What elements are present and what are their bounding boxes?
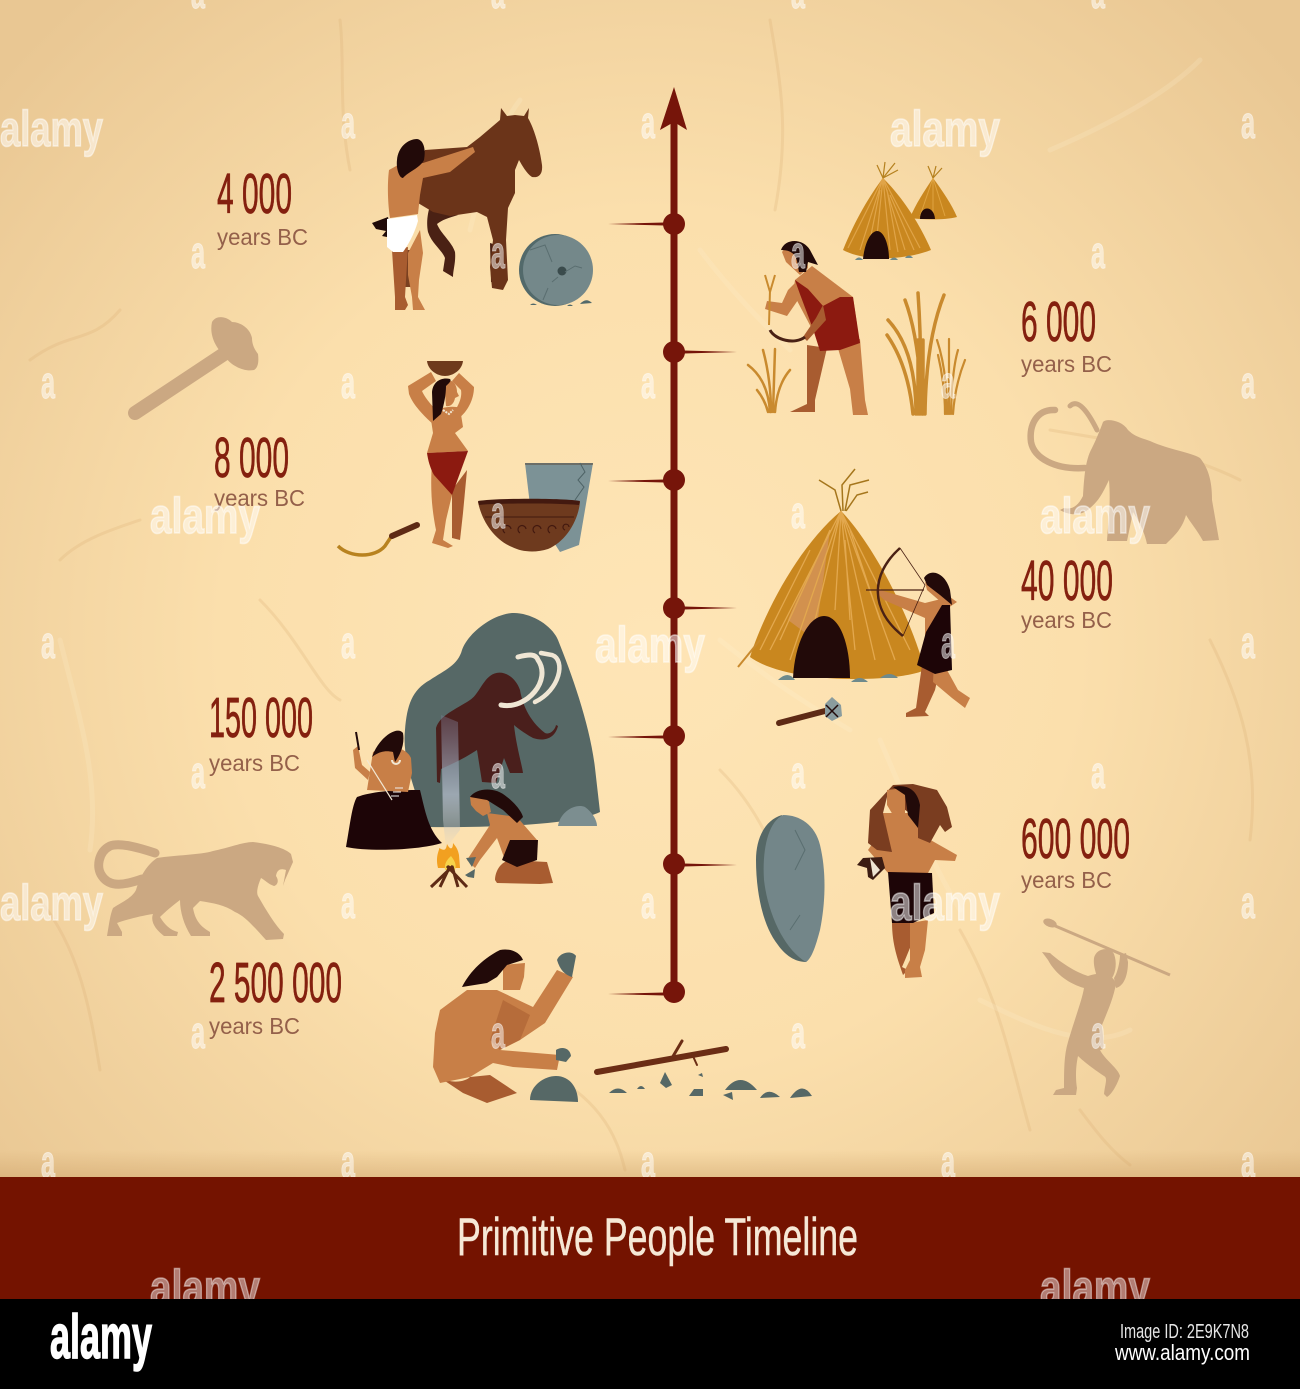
man from behind: [387, 139, 475, 310]
title band: alamy: [150, 1260, 260, 1316]
silhouette: spear thrower: [1042, 917, 1170, 1097]
gray pot: [525, 463, 593, 552]
stone wheel: [519, 234, 593, 306]
label: 40 000 years BC: 40 000: [1021, 549, 1113, 613]
hunter carrying prey: [857, 784, 957, 978]
campfire: [431, 843, 467, 887]
seated toolmaker: [433, 949, 576, 1103]
watermarks: a: [941, 617, 956, 668]
watermarks: a: [1241, 1136, 1256, 1187]
watermarks: a: [491, 747, 506, 798]
label: 6 000 years BC: years BC: [1021, 351, 1112, 377]
seated woman sewing: [346, 731, 442, 850]
watermarks: a: [191, 227, 206, 278]
label: 6 000 years BC: [1021, 290, 1112, 377]
woman: [408, 372, 474, 548]
near hut: [843, 162, 931, 260]
watermarks: alamy: [1040, 488, 1150, 544]
watermarks: alamy: [150, 488, 260, 544]
scene: hand axe and hunter: [756, 784, 957, 978]
image id: Image ID: 2E9K7N8: [1120, 1321, 1249, 1343]
scene: big hut and archer: [738, 469, 970, 723]
kneeling man: [465, 789, 553, 884]
timeline dots: [663, 213, 685, 1003]
label: 150 000 years BC: years BC: [209, 750, 300, 776]
watermarks: a: [791, 227, 806, 278]
label: 2 500 000 years BC: [209, 951, 342, 1039]
label: 8 000 years BC: years BC: [214, 485, 305, 511]
watermarks: a: [641, 877, 656, 928]
silhouette: mammoth: [1031, 404, 1219, 544]
label: 600 000 years BC: [1021, 807, 1130, 893]
watermarks: a: [41, 357, 56, 408]
branch: [597, 1041, 726, 1072]
sickle: [338, 525, 417, 555]
silhouette: sabre-tooth cat: [99, 842, 293, 940]
watermarks: alamy: [595, 617, 705, 673]
watermarks: a: [341, 357, 356, 408]
label: 600 000 years BC: 600 000: [1021, 807, 1130, 871]
painted mammoth: [436, 653, 559, 783]
label: 150 000 years BC: [209, 686, 313, 776]
grass tufts: [748, 293, 965, 414]
clay bowl on head: [427, 361, 463, 376]
label: 4 000 years BC: years BC: [217, 224, 308, 250]
watermarks: a: [791, 747, 806, 798]
footer bar: [0, 1299, 1300, 1389]
label: 2 500 000 years BC: years BC: [209, 1013, 300, 1039]
watermarks: a: [1241, 617, 1256, 668]
label: 600 000 years BC: years BC: [1021, 867, 1112, 893]
silhouette: stone hammer: [135, 317, 258, 413]
title band: [0, 1177, 1300, 1316]
watermarks: a: [491, 1007, 506, 1058]
watermarks: a: [1091, 1007, 1106, 1058]
timeline arrow: [608, 87, 737, 1003]
stone mound: [530, 1076, 578, 1102]
label: 4 000 years BC: 4 000: [217, 162, 292, 226]
timeline ticks: [608, 222, 737, 996]
title: Primitive People Timeline: [457, 1208, 858, 1267]
scene: man with horse and stone wheel: [372, 108, 593, 310]
watermarks: a: [191, 747, 206, 798]
label: 40 000 years BC: [1021, 549, 1113, 633]
watermarks: alamy: [0, 101, 103, 157]
watermarks: a: [491, 227, 506, 278]
watermarks: a: [1241, 877, 1256, 928]
watermarks: alamy: [890, 875, 1000, 931]
cave rock: [405, 613, 600, 827]
watermarks: a: [641, 97, 656, 148]
watermarks: a: [341, 617, 356, 668]
watermarks: a: [341, 1136, 356, 1187]
watermarks: a: [791, 487, 806, 538]
watermarks: a: [641, 1136, 656, 1187]
label: 6 000 years BC: 6 000: [1021, 290, 1096, 354]
watermarks: a: [941, 1136, 956, 1187]
watermarks: a: [1091, 227, 1106, 278]
watermarks: a: [491, 487, 506, 538]
footer logo: alamy: [50, 1303, 152, 1372]
title band: alamy: [1040, 1260, 1150, 1316]
watermarks: a: [341, 97, 356, 148]
boulder: [558, 806, 597, 826]
date labels right: [1021, 290, 1130, 893]
scattered rocks: [609, 1072, 812, 1100]
date labels left: [209, 162, 342, 1039]
watermarks: alamy: [0, 875, 103, 931]
label: 8 000 years BC: [214, 426, 305, 511]
watermarks: a: [41, 617, 56, 668]
watermarks: a: [191, 1007, 206, 1058]
watermarks: a: [1241, 97, 1256, 148]
stone axe: [779, 697, 842, 723]
watermarks: a: [791, 1007, 806, 1058]
archer: [866, 548, 970, 717]
watermarks: a: [41, 1136, 56, 1187]
label: 150 000 years BC: 150 000: [209, 686, 313, 750]
scene: toolmaker with stones: [433, 949, 812, 1103]
watermarks: a: [1241, 357, 1256, 408]
horse: [372, 108, 542, 290]
watermarks: a: [641, 357, 656, 408]
label: 2 500 000 years BC: 2 500 000: [209, 951, 342, 1015]
label: 4 000 years BC: [217, 162, 308, 250]
watermarks: a: [341, 877, 356, 928]
smoke: [441, 715, 460, 848]
scene: small huts and harvester: [748, 162, 965, 415]
url: www.alamy.com: [1114, 1340, 1250, 1365]
scene: woman with bowl and pottery: [338, 361, 593, 555]
watermarks: alamy: [890, 101, 1000, 157]
scene: cave painting: [346, 613, 600, 887]
watermarks: a: [1091, 747, 1106, 798]
far hut: [910, 166, 957, 219]
label: 8 000 years BC: 8 000: [214, 426, 289, 490]
big thatched hut: [738, 469, 925, 682]
label: 40 000 years BC: years BC: [1021, 607, 1112, 633]
decorated bowl: [478, 499, 580, 551]
watermarks: a: [941, 357, 956, 408]
harvesting woman: [765, 241, 868, 415]
hand axe: [756, 815, 824, 962]
